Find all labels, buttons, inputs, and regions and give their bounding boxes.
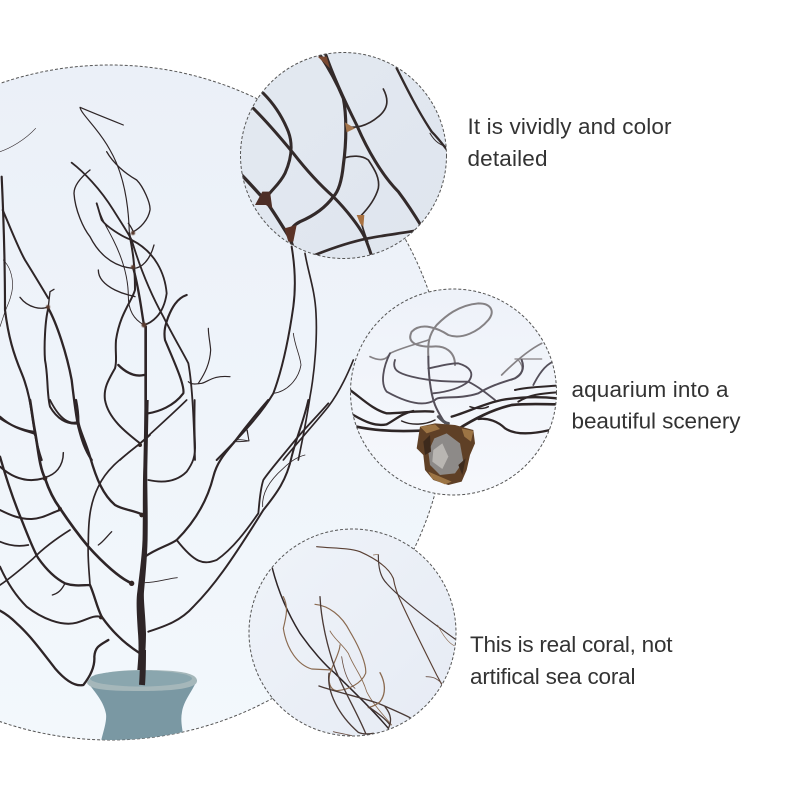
- text block: aquarium into a beautiful scenery: [572, 377, 741, 434]
- panel: detail circle middle, coral base and rock: [350, 289, 557, 495]
- central trunk: [136, 400, 149, 684]
- text block: aquarium into a beautiful scenery: aquarium into a: [572, 377, 729, 402]
- text block: aquarium into a beautiful scenery: beautiful scenery: [572, 408, 741, 434]
- text block: real coral, not artifical sea coral: [470, 632, 673, 689]
- text block: vividly and color detailed: It is vividly and color: [468, 114, 672, 139]
- branch junctions: [43, 443, 144, 619]
- blurred far branches: [370, 303, 542, 380]
- text block: real coral, not artifical sea coral: artifical sea coral: [470, 664, 636, 689]
- vase: [87, 650, 197, 745]
- text block: vividly and color detailed: detailed: [468, 146, 548, 171]
- text block: vividly and color detailed: [468, 114, 672, 171]
- coral branches upper: [0, 107, 353, 685]
- rock base: [417, 423, 475, 485]
- small brown junction marks: [46, 231, 146, 328]
- infographic canvas: [0, 52, 740, 740]
- near branches: [350, 353, 557, 433]
- coral branches lower: [0, 400, 328, 685]
- brown junctions: [255, 57, 364, 242]
- text block: real coral, not artifical sea coral: This is real coral, not: [470, 632, 673, 657]
- panel: detail circle bottom, thin branch tips: [249, 529, 456, 736]
- panel: main coral photo circle: [0, 65, 448, 745]
- panel: detail circle top, close-up of branches: [240, 52, 448, 258]
